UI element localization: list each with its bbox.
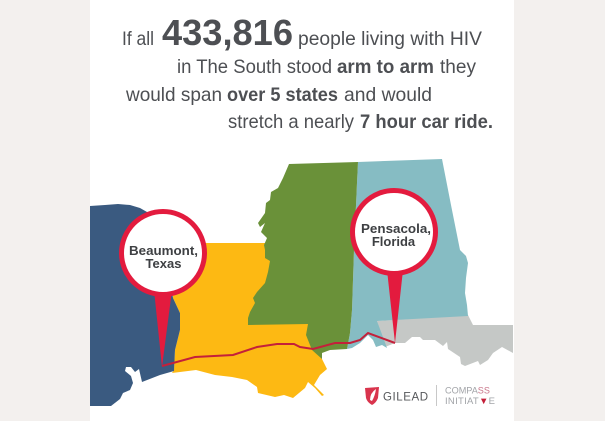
Gilead wordmark: GILEAD	[383, 392, 428, 404]
pin: Pensacola, Florida: Florida	[372, 234, 416, 249]
logo: Gilead Compass Initiative	[365, 385, 495, 407]
route line	[162, 333, 395, 366]
pin: Beaumont, Texas	[122, 212, 204, 367]
headline text: would span	[125, 84, 222, 106]
state: Alabama	[347, 159, 468, 349]
Compass Initiative wordmark: COMPASS	[445, 386, 490, 396]
headline text	[122, 12, 493, 133]
headline text: If all	[122, 28, 154, 50]
headline text: 433,816	[162, 12, 293, 53]
headline text: people living with HIV	[298, 28, 482, 50]
headline text: in The South stood	[177, 56, 332, 78]
state: Louisiana	[172, 240, 327, 398]
icon: Gilead shield	[365, 387, 379, 405]
headline text: they	[440, 56, 476, 78]
pin: Pensacola, Florida	[352, 190, 436, 343]
headline text: arm to arm	[337, 56, 434, 78]
Compass Initiative wordmark	[445, 386, 495, 407]
state: Texas	[90, 204, 180, 406]
pin: Beaumont, Texas: Beaumont,	[129, 243, 198, 258]
headline text: over 5 states	[227, 84, 338, 106]
pin: Beaumont, Texas: Texas	[146, 256, 181, 271]
Compass Initiative wordmark: INITIAT▼E	[445, 396, 495, 407]
map of southern states	[90, 159, 513, 406]
state: Mississippi	[248, 162, 358, 359]
headline text: and would	[344, 84, 432, 106]
headline text: 7 hour car ride.	[360, 111, 493, 133]
state: Florida	[377, 315, 513, 366]
headline text: stretch a nearly	[228, 111, 354, 133]
pin: Pensacola, Florida: Pensacola,	[361, 221, 431, 236]
